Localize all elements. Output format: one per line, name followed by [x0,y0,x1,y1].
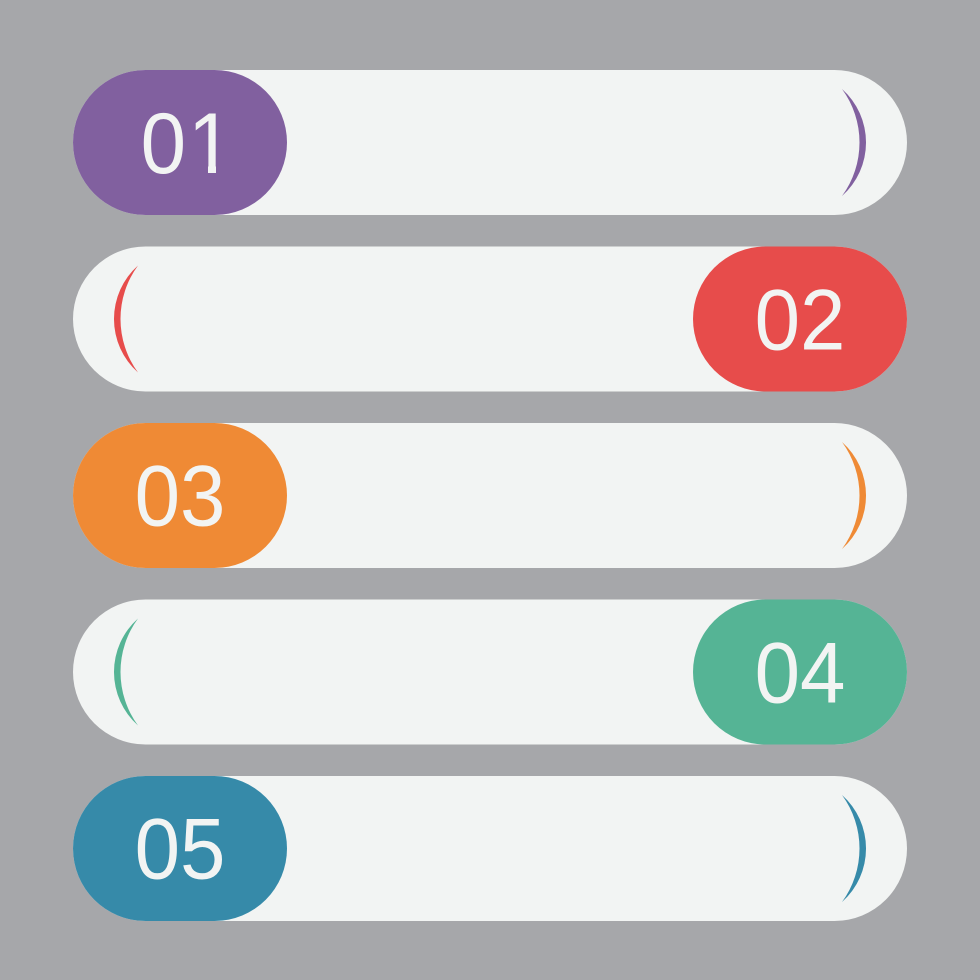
badge 04 [693,600,907,744]
icon: crescent 03 [842,442,866,549]
bar 01 [73,70,907,215]
panel: option 02 [73,246,907,392]
badge 05 [73,776,287,921]
icon: crescent 02 [114,266,138,372]
number 04: 04 [755,625,845,721]
panel: option 03 [73,423,907,568]
panel: option 05 [73,776,907,921]
panel: option 04 [73,600,907,744]
number 05: 05 [135,801,225,897]
badge 03 [73,423,287,568]
bar 03 [73,423,907,568]
badge 02 [693,246,907,392]
number 03: 03 [135,448,225,544]
number 02: 02 [755,272,845,368]
icon: crescent 04 [114,618,138,726]
icon: crescent 05 [842,795,866,902]
icon: crescent 01 [842,89,866,196]
bar 05 [73,776,907,921]
bar 04 [73,600,907,744]
panel: option 01 [73,70,907,215]
badge 01 [73,70,287,215]
number 01: 01 [141,95,233,191]
bar 02 [73,246,907,392]
foot mask for digit 1 [186,165,236,176]
